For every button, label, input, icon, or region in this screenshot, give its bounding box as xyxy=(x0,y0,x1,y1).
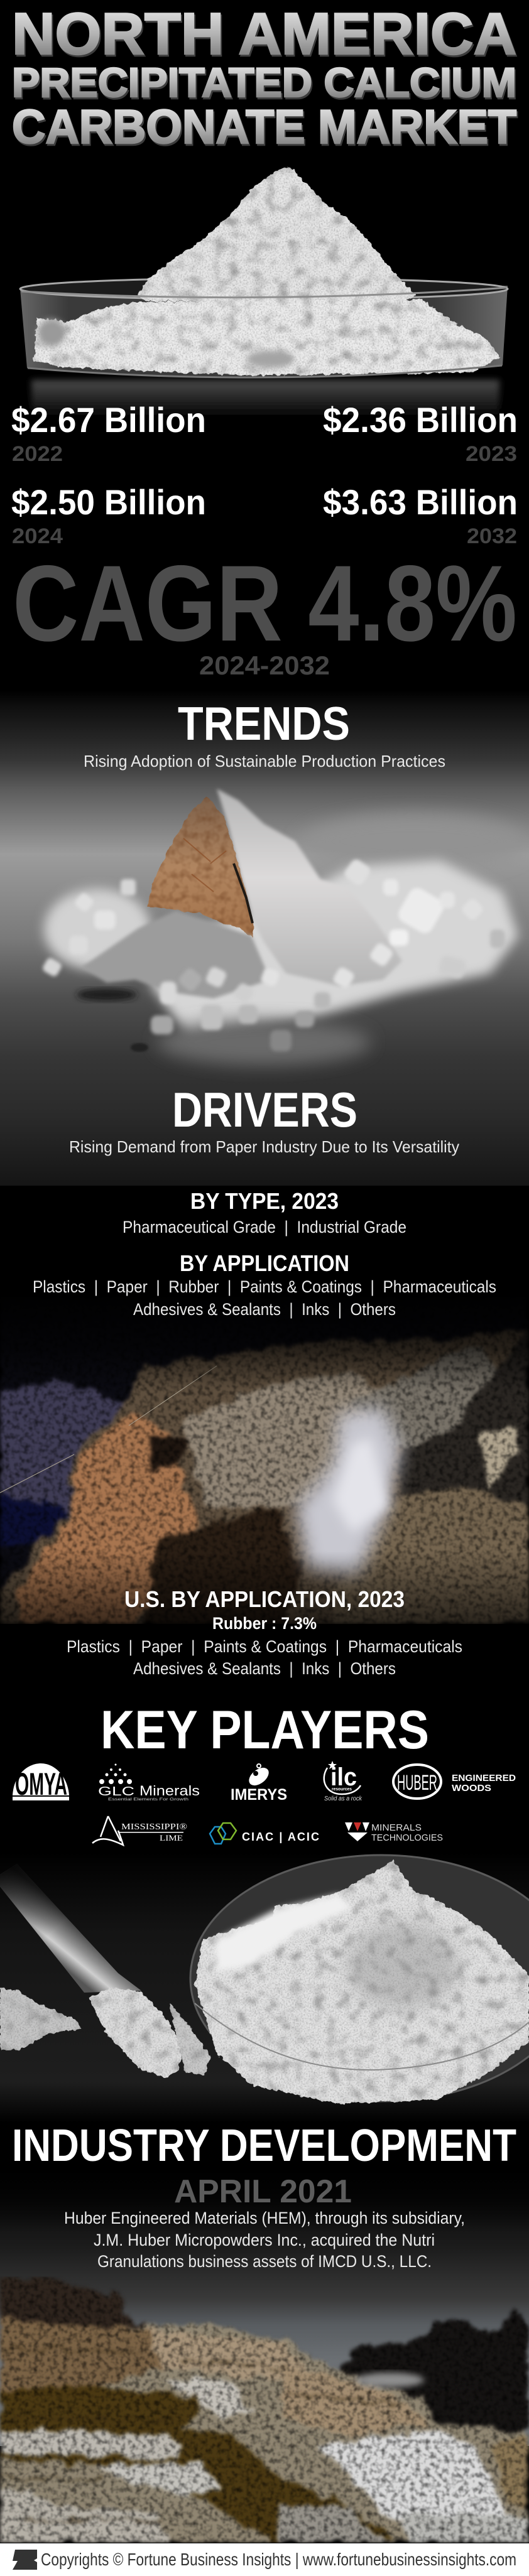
logo: Mississippi Lime: MISSISSIPPI® xyxy=(121,1822,187,1832)
stat: 2024: 2024 xyxy=(12,524,63,548)
by application list: Adhesives & Sealants | Inks | Others xyxy=(133,1300,396,1319)
development text: Huber Engineered Materials (HEM), through its subsidiary, xyxy=(64,2209,465,2227)
stat: 2023: 2023 xyxy=(466,442,517,466)
trends text: Rising Adoption of Sustainable Production Practices xyxy=(84,752,445,771)
logo: GLC Minerals: Minerals xyxy=(139,1783,200,1799)
image: travertine terraces xyxy=(0,2163,529,2543)
logo: ILC Resources xyxy=(324,1761,363,1802)
panel: header xyxy=(12,1,518,418)
logo: Omya xyxy=(13,1763,69,1802)
development text: Granulations business assets of IMCD U.S., LLC. xyxy=(97,2252,432,2271)
U.S. by application heading: U.S. BY APPLICATION, 2023 xyxy=(124,1586,405,1612)
title: CARBONATE MARKET xyxy=(13,102,518,156)
by application list xyxy=(33,1277,496,1319)
logo: Minerals Technologies: MINERALS xyxy=(371,1822,422,1833)
panel: trends and drivers with crystals photo xyxy=(0,691,529,1186)
image: crystals and stone xyxy=(41,789,528,1065)
panel: industry development xyxy=(0,2121,529,2543)
logo: ILC Resources: ilc xyxy=(330,1763,357,1791)
development text xyxy=(64,2209,465,2271)
title: NORTH AMERICA xyxy=(12,1,516,67)
logo: Omya: OMYA xyxy=(15,1767,67,1802)
trends heading: TRENDS xyxy=(178,697,350,750)
logo: Imerys: IMERYS xyxy=(231,1786,287,1804)
logo: ILC Resources: resources xyxy=(332,1787,352,1792)
drivers text: Rising Demand from Paper Industry Due to Its Versatility xyxy=(69,1137,459,1156)
stat: 2024 xyxy=(11,482,206,548)
rubber share: Rubber : 7.3% xyxy=(212,1614,317,1633)
logo: Huber Engineered Woods: ENGINEERED xyxy=(452,1773,516,1783)
logo: GLC Minerals xyxy=(98,1763,200,1802)
date: APRIL 2021 xyxy=(174,2173,352,2210)
image: powder dish and spoon xyxy=(0,1853,529,2123)
stat: 2023: $2.36 Billion xyxy=(323,400,518,440)
photo background xyxy=(0,691,529,1186)
panel: segmentation xyxy=(0,1188,529,1678)
stat: 2022 xyxy=(11,400,206,466)
logo: CIAC ACIC: CIAC | ACIC xyxy=(242,1831,319,1843)
stat: 2032: $3.63 Billion xyxy=(323,482,518,522)
logo: ILC Resources: Solid as a rock xyxy=(324,1795,363,1802)
U.S. application list xyxy=(67,1637,462,1678)
logo: Minerals Technologies xyxy=(345,1822,443,1843)
stat: 2022: 2022 xyxy=(12,442,63,466)
title: PRECIPITATED CALCIUM xyxy=(12,59,516,106)
logo: Mississippi Lime: LIME xyxy=(160,1833,183,1843)
stat: 2023 xyxy=(323,400,518,466)
logo: Mississippi Lime xyxy=(92,1816,187,1845)
logo: CIAC ACIC xyxy=(210,1823,319,1844)
logo: Imerys xyxy=(231,1764,287,1804)
logo: Minerals Technologies: TECHNOLOGIES xyxy=(371,1832,443,1843)
logo: Huber Engineered Woods: HUBER xyxy=(397,1771,437,1795)
title: PRECIPITATED CALCIUM xyxy=(13,61,518,107)
logo: Huber Engineered Woods xyxy=(393,1765,516,1799)
logo: Huber Engineered Woods: WOODS xyxy=(452,1783,491,1794)
U.S. application list: Plastics | Paper | Paints & Coatings | Pharmaceuticals xyxy=(67,1637,462,1656)
footer xyxy=(0,2543,529,2576)
logo: GLC Minerals: Essential Elements For Growth xyxy=(108,1798,188,1802)
image: powder in glass dish xyxy=(20,166,508,418)
U.S. application list: Adhesives & Sealants | Inks | Others xyxy=(133,1659,396,1678)
title: CARBONATE MARKET xyxy=(12,100,516,154)
by application heading: BY APPLICATION xyxy=(180,1250,349,1276)
drivers heading: DRIVERS xyxy=(172,1082,357,1137)
by type list: Pharmaceutical Grade | Industrial Grade xyxy=(123,1218,406,1237)
CAGR headline: 2024-2032 xyxy=(199,651,330,680)
title: NORTH AMERICA xyxy=(13,3,518,68)
image: calcium rock formation xyxy=(0,1297,529,1624)
stat: 2032 xyxy=(323,482,518,548)
key players heading: KEY PLAYERS xyxy=(101,1700,429,1760)
development text: J.M. Huber Micropowders Inc., acquired the Nutri xyxy=(94,2231,435,2249)
stat: 2024: $2.50 Billion xyxy=(11,482,206,522)
by type heading: BY TYPE, 2023 xyxy=(190,1188,339,1214)
icon: Fortune Business Insights logo xyxy=(13,2550,37,2570)
stat: 2022: $2.67 Billion xyxy=(11,400,206,440)
panel: market size stats xyxy=(11,400,518,680)
stat: 2032: 2032 xyxy=(467,524,517,548)
logo: GLC Minerals: GLC xyxy=(98,1785,134,1799)
title xyxy=(12,1,518,156)
panel: key players xyxy=(13,1700,516,1845)
